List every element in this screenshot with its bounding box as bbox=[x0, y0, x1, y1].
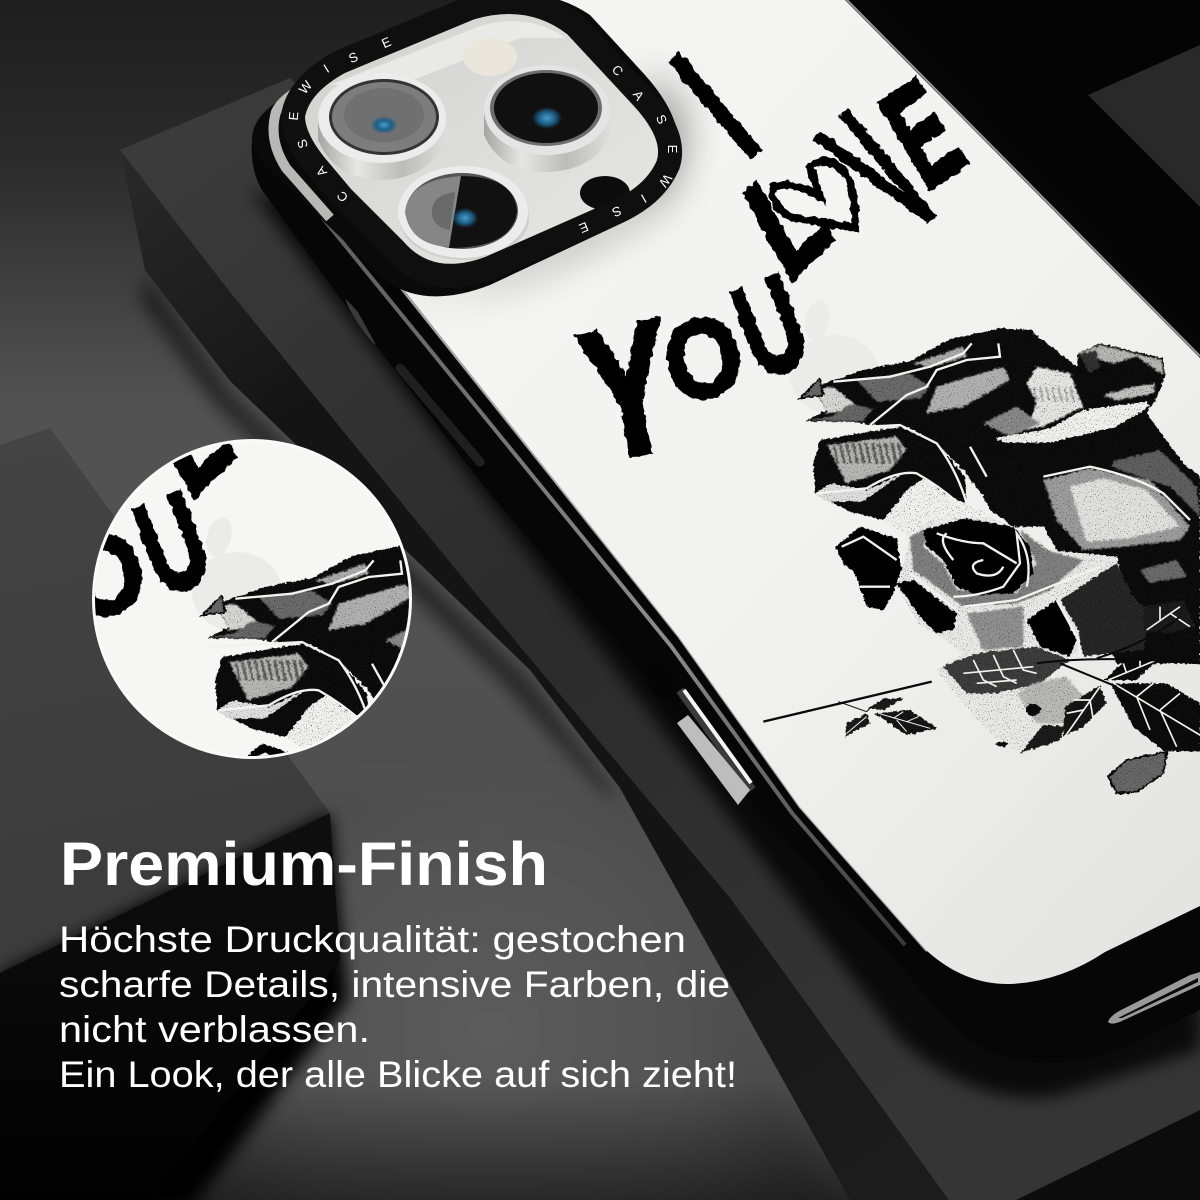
bumper translucent stripe bbox=[300, 190, 905, 945]
flash bbox=[463, 38, 517, 76]
casewise brand lettering: S bbox=[294, 137, 311, 150]
volume button bbox=[400, 368, 480, 462]
casewise brand lettering: E bbox=[286, 111, 301, 121]
glossy black bumper bbox=[252, 0, 1200, 1063]
case artwork bbox=[568, 23, 1200, 793]
casewise brand lettering: W bbox=[296, 77, 316, 97]
bottom-right shadow corner bbox=[1016, 1110, 1200, 1200]
side button dark groove bbox=[680, 690, 752, 790]
casewise brand lettering: E bbox=[665, 145, 680, 154]
magnified detail: L bbox=[127, 342, 253, 529]
translucent outer ring bbox=[274, 84, 330, 218]
phone case shadow bbox=[250, 190, 1200, 1098]
top-right darkness bbox=[830, 0, 1200, 520]
casewise brand lettering: S bbox=[653, 112, 670, 127]
heart replacing the letter O bbox=[773, 161, 855, 228]
body copy: nicht verblassen. bbox=[59, 1009, 370, 1050]
magnified detail: O bbox=[53, 506, 158, 646]
bumper chrome edge bbox=[385, 268, 927, 951]
microphone hole bbox=[580, 176, 630, 210]
letter V: V bbox=[784, 82, 977, 260]
silver side button face bbox=[677, 715, 750, 805]
mute switch bbox=[345, 298, 376, 345]
casewise brand lettering: S bbox=[610, 203, 624, 220]
letter L: L bbox=[725, 125, 851, 312]
faint logo ghost bbox=[790, 298, 880, 415]
letter U: U bbox=[716, 244, 826, 408]
letter Y: Y bbox=[568, 280, 690, 501]
lens window glass bbox=[293, 2, 670, 276]
casewise brand lettering: A bbox=[630, 87, 647, 103]
lens two bbox=[484, 65, 610, 172]
magnified detail bbox=[95, 444, 409, 756]
body copy: Ein Look, der alle Blicke auf sich zieht! bbox=[59, 1054, 737, 1095]
casewise brand lettering: I bbox=[638, 191, 649, 206]
magnified detail: U bbox=[118, 461, 228, 625]
lens three bbox=[398, 166, 529, 260]
casewise brand lettering: A bbox=[313, 164, 330, 180]
letter O: O bbox=[651, 289, 756, 429]
camera bump shadow bbox=[400, 70, 682, 297]
casewise brand lettering: C bbox=[334, 188, 351, 205]
black band carrying lettering bbox=[293, 2, 670, 276]
button recess bbox=[640, 658, 686, 708]
body copy: scharfe Details, intensive Farben, die bbox=[59, 964, 730, 1005]
top-right block face bbox=[1088, 45, 1200, 207]
magnifier circle bbox=[92, 439, 412, 759]
phone case body bbox=[252, 0, 1200, 1063]
circle white border bbox=[92, 439, 412, 759]
charging port bbox=[1108, 972, 1200, 1024]
script lettering bbox=[573, 51, 970, 458]
floor bottom falloff bbox=[150, 1080, 900, 1200]
bump outer glossy frame bbox=[252, 0, 679, 296]
casewise brand lettering: E bbox=[577, 219, 591, 236]
lower floor glow bbox=[0, 800, 850, 1200]
heading: Premium-Finish bbox=[60, 830, 548, 898]
window highlight bbox=[330, 21, 565, 85]
letter I: I bbox=[642, 23, 788, 189]
body copy bbox=[59, 919, 737, 1095]
phone white printed back bbox=[300, 0, 1200, 984]
charging port inner bbox=[1118, 978, 1198, 1018]
casewise brand lettering: I bbox=[321, 61, 332, 76]
casewise brand lettering bbox=[286, 34, 680, 236]
camera bump bbox=[252, 0, 680, 296]
body copy: Höchste Druckqualität: gestochen bbox=[59, 919, 686, 960]
casewise brand lettering: S bbox=[346, 49, 361, 66]
casewise brand lettering: C bbox=[609, 62, 626, 79]
small block top face bbox=[0, 428, 330, 973]
top right chrome edge bbox=[845, 0, 1200, 356]
front block dark face bbox=[0, 813, 340, 1200]
side button shine bbox=[684, 690, 751, 783]
front block dark face shadow bbox=[0, 813, 348, 1200]
lens one bbox=[318, 73, 447, 180]
letter E: E bbox=[859, 49, 986, 218]
casewise brand lettering: W bbox=[656, 171, 675, 191]
rose and skull illustration bbox=[763, 328, 1200, 793]
casewise brand lettering: E bbox=[379, 34, 394, 51]
large block side face bbox=[120, 150, 949, 1200]
soft block shadow on floor bbox=[140, 275, 620, 800]
